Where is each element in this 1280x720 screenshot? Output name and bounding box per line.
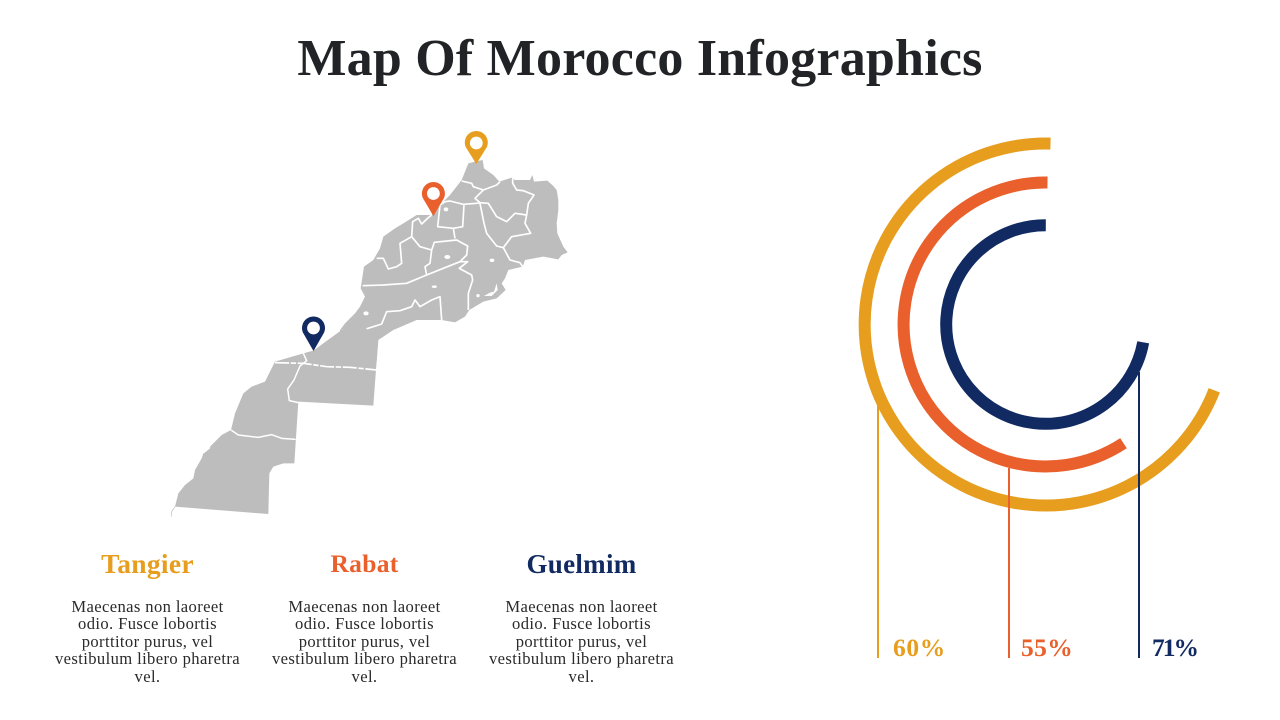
text block: Guelmim: porttitor purus, vel xyxy=(516,632,647,650)
title: Map Of Morocco Infographics xyxy=(297,30,983,87)
text block: Rabat: Maecenas non laoreet xyxy=(288,596,441,616)
arc: Rabat 55% xyxy=(904,182,1124,466)
text block: Tangier: Tangier xyxy=(101,548,194,579)
value: 55%: 55% xyxy=(1021,633,1073,662)
text block: Tangier: vel. xyxy=(135,666,160,686)
chart: concentric arcs xyxy=(865,144,1214,506)
leader line: Rabat xyxy=(1008,468,1010,658)
arc: Tangier 60% xyxy=(865,144,1214,506)
text block: Tangier xyxy=(55,548,240,686)
text block: Guelmim: Maecenas non laoreet xyxy=(505,596,658,616)
text block: Rabat: vestibulum libero pharetra xyxy=(272,649,457,668)
text block: Rabat: vel. xyxy=(352,666,377,686)
text block: Rabat: Rabat xyxy=(330,549,399,578)
arc: Guelmim 71% xyxy=(946,225,1143,424)
map: northern regions xyxy=(340,160,568,362)
text block: Tangier: porttitor purus, vel xyxy=(82,632,213,650)
text block: Tangier: Maecenas non laoreet xyxy=(71,596,224,616)
text block: Tangier: vestibulum libero pharetra xyxy=(55,649,240,668)
leader line: Guelmim xyxy=(1138,372,1140,658)
text block: Tangier: odio. Fusce lobortis xyxy=(78,614,217,633)
text block: Guelmim: vel. xyxy=(569,666,594,686)
pin: Guelmim xyxy=(302,317,325,351)
text block: Rabat: odio. Fusce lobortis xyxy=(295,614,434,633)
text block: Guelmim xyxy=(489,549,674,686)
text block: Guelmim: vestibulum libero pharetra xyxy=(489,649,674,668)
map: southern regions xyxy=(171,323,378,517)
text block: Rabat: porttitor purus, vel xyxy=(299,632,430,650)
leader line: Tangier xyxy=(877,405,879,658)
pin: Tangier xyxy=(465,131,488,164)
value: 71%: 71% xyxy=(1152,633,1197,662)
value: 60%: 60% xyxy=(893,633,946,662)
pin: Rabat xyxy=(422,182,445,216)
text block: Guelmim: odio. Fusce lobortis xyxy=(512,614,651,633)
text block: Guelmim: Guelmim xyxy=(526,549,637,579)
text block: Rabat xyxy=(272,549,457,686)
